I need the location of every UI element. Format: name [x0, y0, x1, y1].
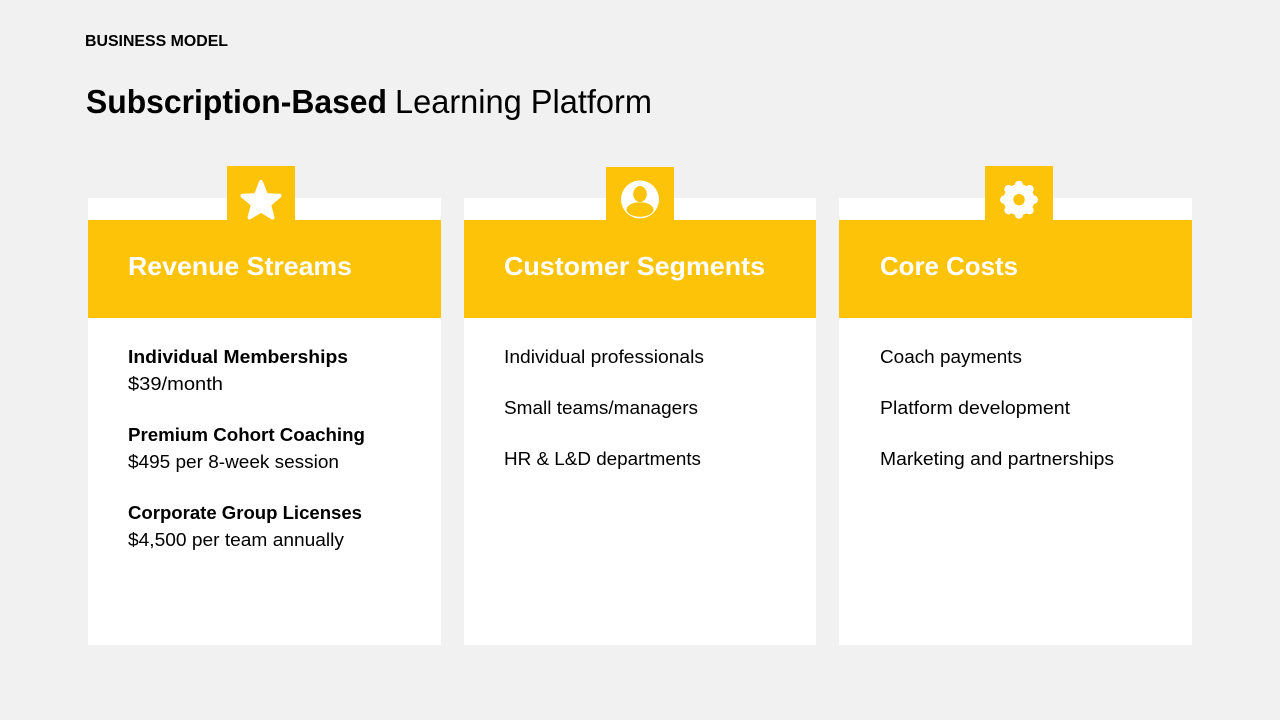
- revenue item: corporate group licenses: [128, 502, 362, 550]
- icon: person: [621, 180, 659, 218]
- revenue item: premium cohort coaching: [128, 424, 365, 472]
- customer segment list: Small teams/managers: [504, 397, 698, 418]
- revenue item: premium cohort coaching: Premium Cohort Coaching: [128, 424, 365, 445]
- customer segment list: HR & L&D departments: [504, 448, 701, 469]
- revenue item: corporate group licenses: Corporate Group Licenses: [128, 502, 362, 523]
- core costs list: [880, 346, 1114, 469]
- eyebrow label: BUSINESS MODEL: [85, 33, 228, 50]
- core costs list: Marketing and partnerships: [880, 448, 1114, 469]
- heading: customer segments: Customer Segments: [504, 251, 765, 281]
- title: [86, 83, 652, 120]
- revenue item: individual memberships: Individual Memberships: [128, 346, 348, 367]
- revenue item: premium cohort coaching: $495 per 8-week session: [128, 451, 339, 472]
- panel: customer segments: [464, 167, 816, 645]
- panel: core costs: [839, 166, 1192, 645]
- core costs list: Coach payments: [880, 346, 1022, 367]
- customer segment list: Individual professionals: [504, 346, 704, 367]
- title: Subscription-Based: [86, 83, 387, 120]
- revenue item: individual memberships: [128, 346, 348, 394]
- heading: core costs: Core Costs: [880, 251, 1018, 281]
- title: Learning Platform: [395, 83, 652, 120]
- icon: gear: [1000, 181, 1038, 219]
- revenue item: corporate group licenses: $4,500 per team annually: [128, 529, 345, 550]
- core costs list: Platform development: [880, 397, 1070, 418]
- panel: revenue streams: [88, 166, 441, 645]
- customer segment list: [504, 346, 704, 469]
- heading: revenue streams: Revenue Streams: [128, 251, 352, 281]
- revenue item: individual memberships: $39/month: [128, 373, 223, 394]
- icon: star: [242, 182, 280, 218]
